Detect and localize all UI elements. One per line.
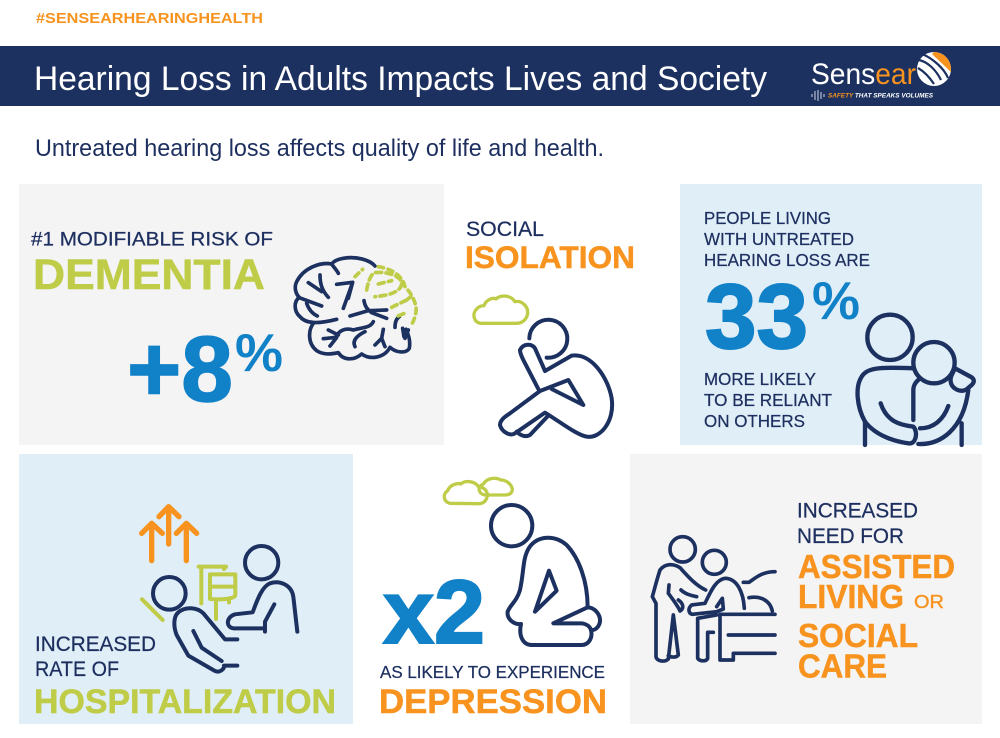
hashtag: #SENSEARHEARINGHEALTH bbox=[36, 10, 263, 27]
panel: assisted living bbox=[630, 454, 982, 724]
icon: brain bbox=[295, 258, 416, 359]
icon: carer with patient in bed bbox=[652, 537, 775, 661]
reliant outro text bbox=[704, 369, 832, 431]
icon: cloud bbox=[474, 296, 528, 323]
title banner bbox=[0, 46, 1000, 106]
reliant stat: % bbox=[812, 272, 860, 331]
panel: social isolation bbox=[465, 218, 635, 437]
title: Hearing Loss in Adults Impacts Lives and Society bbox=[34, 60, 767, 98]
icon: sitting person bbox=[500, 320, 612, 437]
icon: kneeling person bbox=[491, 505, 600, 645]
panel: dementia bbox=[19, 184, 444, 445]
assisted living heading: OR bbox=[914, 592, 944, 612]
dementia heading: DEMENTIA bbox=[33, 251, 265, 299]
reliant stat: 33 bbox=[705, 266, 808, 368]
panel: hospitalization bbox=[19, 454, 353, 724]
dementia label: #1 MODIFIABLE RISK OF bbox=[31, 230, 273, 250]
reliant stat bbox=[705, 266, 860, 368]
reliant outro text: TO BE RELIANT bbox=[704, 390, 832, 410]
dementia stat: % bbox=[235, 324, 283, 383]
icon: clouds bbox=[444, 478, 512, 504]
icon: up arrows bbox=[142, 507, 197, 561]
logo bbox=[811, 52, 951, 101]
logo: SAFETY THAT SPEAKS VOLUMES bbox=[828, 92, 933, 100]
isolation label: SOCIAL bbox=[466, 218, 544, 241]
hospitalization label bbox=[35, 632, 156, 681]
reliant intro text: WITH UNTREATED bbox=[704, 229, 854, 249]
reliant outro text: ON OTHERS bbox=[704, 411, 805, 431]
assisted living label bbox=[797, 498, 918, 548]
assisted living heading: LIVING bbox=[798, 578, 904, 615]
subtitle: Untreated hearing loss affects quality of life and health. bbox=[35, 135, 604, 162]
depression label: AS LIKELY TO EXPERIENCE bbox=[380, 662, 605, 682]
hospitalization label: RATE OF bbox=[35, 657, 119, 681]
depression stat: x2 bbox=[383, 563, 485, 663]
icon: embracing people bbox=[858, 315, 974, 445]
assisted living heading: ASSISTED bbox=[798, 548, 955, 585]
panel: reliant on others bbox=[680, 184, 982, 445]
isolation heading: ISOLATION bbox=[465, 239, 635, 275]
assisted living heading: SOCIAL bbox=[798, 617, 918, 654]
panel: depression bbox=[379, 478, 607, 721]
assisted living label: INCREASED bbox=[797, 498, 918, 522]
dementia stat bbox=[127, 317, 283, 421]
icon: patient and carer bbox=[142, 546, 297, 672]
reliant intro text: PEOPLE LIVING bbox=[704, 208, 831, 228]
logo: Sensear bbox=[811, 58, 916, 91]
hospitalization heading: HOSPITALIZATION bbox=[34, 683, 336, 721]
reliant outro text: MORE LIKELY bbox=[704, 369, 816, 389]
hospitalization label: INCREASED bbox=[35, 632, 156, 656]
assisted living heading: CARE bbox=[798, 648, 887, 684]
assisted living label: NEED FOR bbox=[797, 524, 904, 548]
reliant intro text bbox=[704, 208, 870, 270]
assisted living heading bbox=[798, 548, 955, 684]
dementia stat: +8 bbox=[127, 317, 233, 421]
depression heading: DEPRESSION bbox=[379, 683, 607, 721]
reliant intro text: HEARING LOSS ARE bbox=[704, 250, 870, 270]
